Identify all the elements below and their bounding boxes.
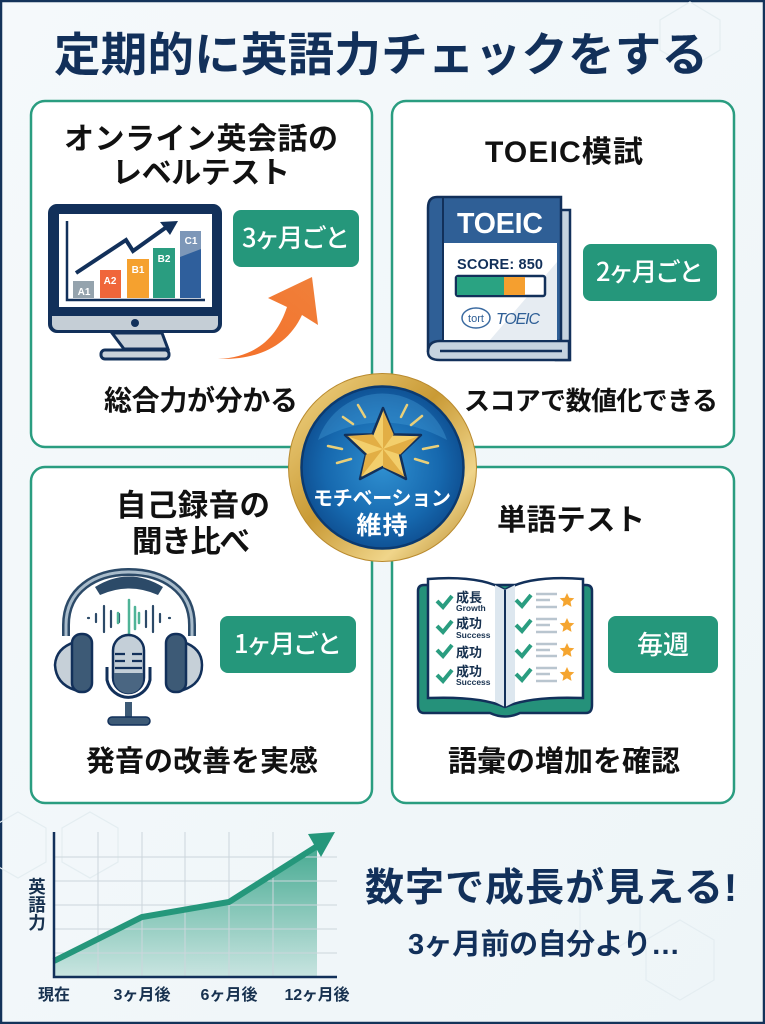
- panel heading: レベルテスト: [112, 157, 290, 190]
- x axis labels: 6ヶ月後: [200, 985, 258, 1004]
- callout: 数字で成長が見える: 数字で成長が見える!: [365, 867, 737, 910]
- icon: monitor with bar chart: [49, 205, 221, 359]
- icon: open vocabulary book: Growth: [456, 603, 486, 613]
- title: 定期的に英語力チェックをする: [54, 29, 708, 81]
- medal text: 維持: [356, 512, 408, 540]
- callout: 数字で成長が見える: 3ヶ月前の自分より…: [408, 928, 680, 961]
- icon: open vocabulary book: [418, 578, 592, 716]
- medal: モチベーション維持: [288, 374, 476, 562]
- pill: 1ヶ月ごと: [220, 616, 356, 673]
- icon: open vocabulary book: Success: [456, 630, 491, 640]
- icon: TOEIC book: tort: [468, 313, 484, 325]
- panel: 自己録音の聞き比べ: [31, 467, 372, 803]
- icon: TOEIC book: SCORE: 850: [457, 257, 543, 273]
- arrow: orange upward: [218, 277, 318, 359]
- panel: TOEIC模試: [392, 101, 734, 447]
- panel heading: TOEIC模試: [485, 136, 643, 169]
- icon: monitor with bar chart: B2: [158, 254, 171, 265]
- line chart: 英語力の成長: [28, 832, 350, 1004]
- icon: monitor with bar chart: A2: [104, 276, 117, 287]
- x axis labels: [38, 985, 350, 1004]
- x axis labels: 3ヶ月後: [114, 985, 170, 1004]
- caption: 発音の改善を実感: [86, 745, 318, 778]
- icon: TOEIC book: TOEIC: [457, 208, 543, 240]
- medal text: [313, 488, 451, 540]
- icon: open vocabulary book: 成功: [456, 664, 482, 679]
- panel heading: [116, 489, 270, 559]
- icon: monitor with bar chart: A1: [78, 287, 91, 298]
- caption: 語彙の増加を確認: [448, 745, 680, 778]
- panel heading: 自己録音の: [116, 489, 270, 523]
- callout: 数字で成長が見える: [365, 867, 737, 961]
- panel heading: 単語テスト: [497, 504, 645, 537]
- panel heading: [64, 123, 338, 190]
- icon: open vocabulary book: Success: [456, 677, 491, 687]
- icon: headphones and microphone: [55, 572, 202, 725]
- panel heading: オンライン英会話の: [64, 123, 338, 156]
- x axis labels: 12ヶ月後: [284, 985, 350, 1004]
- icon: TOEIC book: [428, 197, 570, 360]
- y axis label: 力: [28, 913, 46, 933]
- x axis labels: 現在: [38, 985, 70, 1004]
- icon: monitor with bar chart: B1: [132, 265, 145, 276]
- icon: open vocabulary book: 成功: [456, 616, 482, 631]
- panel heading: 聞き比べ: [132, 525, 250, 559]
- caption: 総合力が分かる: [104, 384, 298, 416]
- y axis label: 語: [28, 895, 46, 915]
- icon: open vocabulary book: 成長: [456, 590, 482, 605]
- pill: 毎週: [608, 616, 718, 673]
- pill: 2ヶ月ごと: [583, 244, 717, 301]
- star with rays: [328, 405, 438, 479]
- pill: 2ヶ月ごと: 2ヶ月ごと: [596, 252, 704, 289]
- y axis label: 英: [28, 877, 46, 897]
- pill: 3ヶ月ごと: [233, 210, 359, 267]
- medal text: モチベーション: [313, 488, 451, 510]
- y axis label: [28, 877, 46, 933]
- icon: open vocabulary book: 成功: [456, 645, 482, 660]
- icon: TOEIC book: TOEIC: [496, 311, 540, 328]
- icon: monitor with bar chart: C1: [185, 236, 198, 247]
- pill: 3ヶ月ごと: 3ヶ月ごと: [242, 218, 350, 255]
- panel: 単語テスト: [392, 467, 734, 803]
- pill: 毎週: 毎週: [637, 625, 689, 662]
- caption: スコアで数値化できる: [464, 386, 718, 416]
- panel: オンライン英会話のレベルテスト: [31, 101, 372, 447]
- pill: 1ヶ月ごと: 1ヶ月ごと: [234, 624, 342, 661]
